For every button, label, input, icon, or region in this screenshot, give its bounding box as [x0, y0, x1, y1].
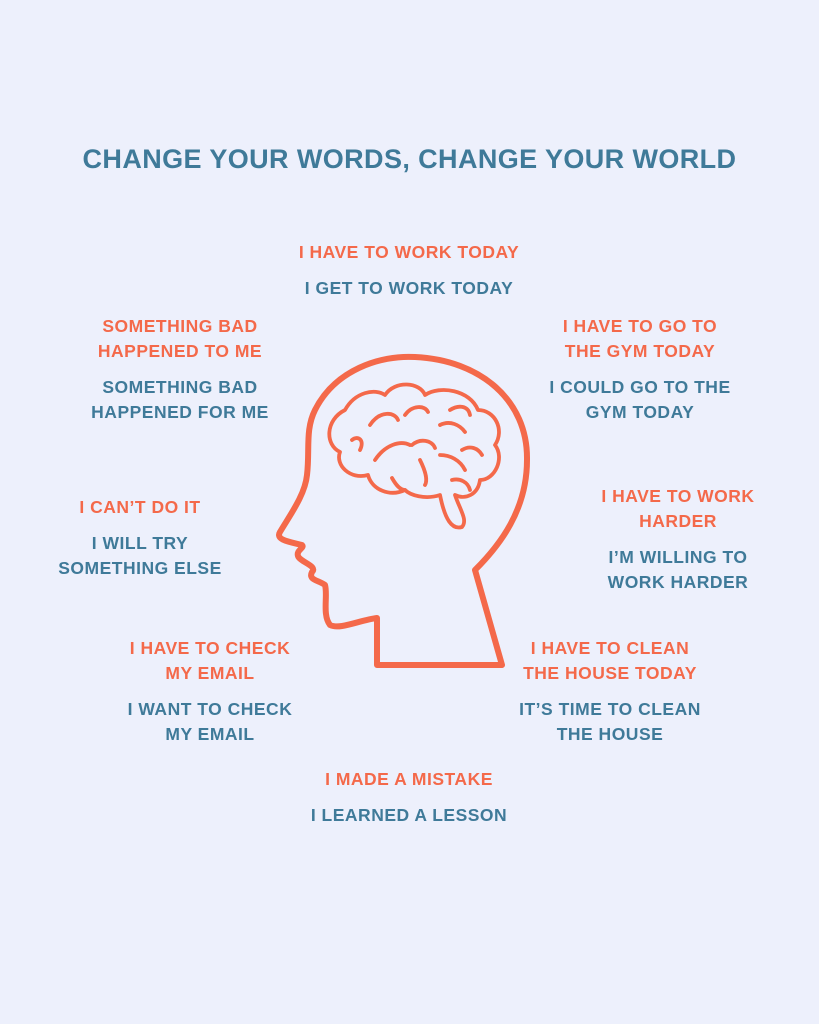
pair: gym: THE GYM TODAY	[565, 341, 715, 361]
pair: gym	[549, 316, 731, 422]
pair: something bad: SOMETHING BAD	[102, 316, 258, 336]
pair: email: I HAVE TO CHECK	[130, 638, 290, 658]
title: CHANGE YOUR WORDS, CHANGE YOUR WORLD	[83, 144, 736, 174]
pair: work harder: HARDER	[639, 511, 717, 531]
pair: work harder	[601, 486, 755, 592]
pair: something bad: HAPPENED TO ME	[98, 341, 262, 361]
pair: can't do it: SOMETHING ELSE	[58, 558, 222, 578]
pair: something bad: SOMETHING BAD	[102, 377, 258, 397]
pair: mistake: I LEARNED A LESSON	[311, 805, 507, 825]
pair: can't do it: I CAN’T DO IT	[79, 497, 201, 517]
pair: mistake: I MADE A MISTAKE	[325, 769, 493, 789]
pair: work harder: I’M WILLING TO	[609, 547, 747, 567]
pair: gym: I COULD GO TO THE	[549, 377, 731, 397]
pair: email: MY EMAIL	[165, 663, 255, 683]
pair: something bad: HAPPENED FOR ME	[91, 402, 269, 422]
pair: work today	[299, 242, 519, 298]
pair: email: MY EMAIL	[165, 724, 255, 744]
pair: gym: I HAVE TO GO TO	[563, 316, 717, 336]
pair: can't do it	[58, 497, 222, 578]
pair: work harder: WORK HARDER	[608, 572, 748, 592]
pair: can't do it: I WILL TRY	[92, 533, 188, 553]
pair: email	[128, 638, 292, 744]
pair: clean house: I HAVE TO CLEAN	[531, 638, 689, 658]
pair: clean house	[519, 638, 701, 744]
pair: clean house: THE HOUSE	[557, 724, 663, 744]
pair: mistake	[311, 769, 507, 825]
pair: clean house: THE HOUSE TODAY	[523, 663, 697, 683]
pair: something bad	[91, 316, 269, 422]
pair: gym: GYM TODAY	[586, 402, 694, 422]
pair: email: I WANT TO CHECK	[128, 699, 292, 719]
pair: work today: I HAVE TO WORK TODAY	[299, 242, 519, 262]
pair: work harder: I HAVE TO WORK	[601, 486, 755, 506]
pair: clean house: IT’S TIME TO CLEAN	[519, 699, 701, 719]
pair: work today: I GET TO WORK TODAY	[305, 278, 513, 298]
